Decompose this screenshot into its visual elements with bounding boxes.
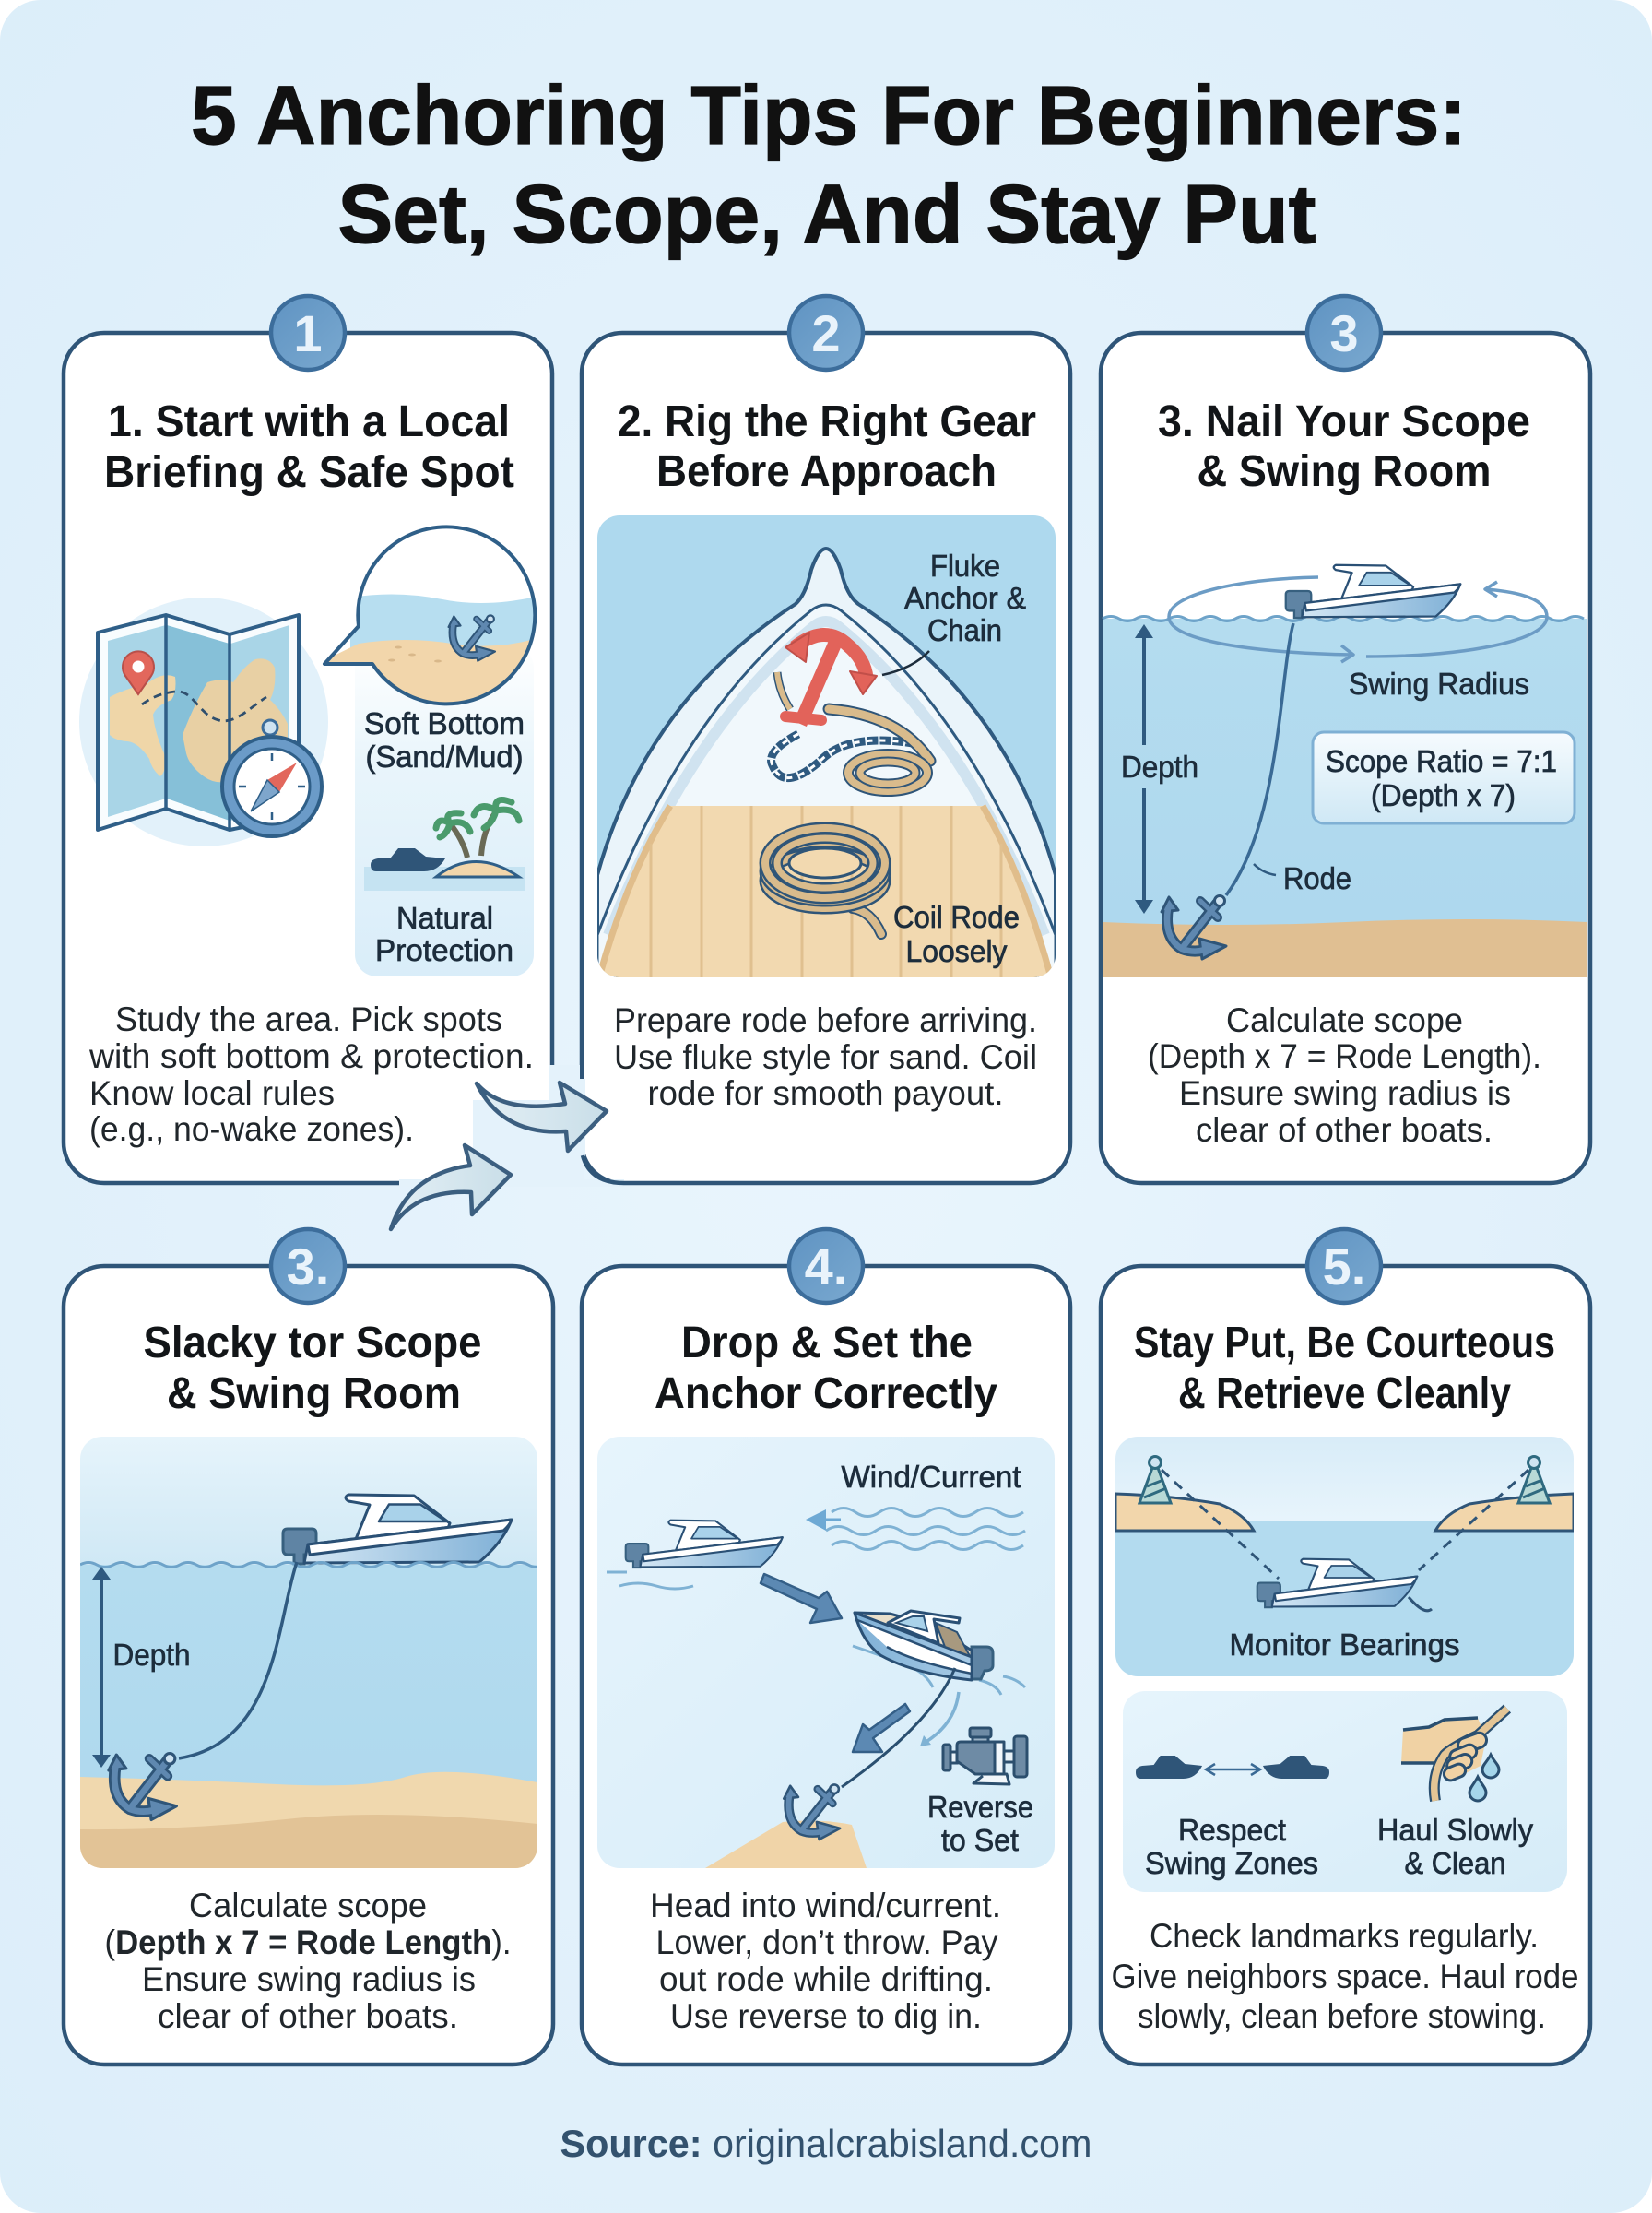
label: swing radius: Swing Radius (1349, 667, 1529, 701)
line: bow rode (1409, 1597, 1432, 1611)
bottom edge cover between cards (399, 1079, 624, 1187)
label: depth: Depth (1121, 750, 1198, 784)
line: rode (842, 1668, 955, 1787)
label: respect swing zones: Respect (1178, 1813, 1286, 1847)
heading (144, 1319, 481, 1418)
heading 1 (104, 397, 514, 497)
body text 1: (e.g., no-wake zones). (89, 1110, 414, 1148)
label: natural protection: Protection (375, 933, 513, 967)
body text 3: clear of other boats. (1196, 1111, 1493, 1149)
source line: Source: originalcrabisland.com (560, 2122, 1092, 2165)
panel: tip 4 drop and set (582, 1229, 1070, 2065)
body text 2: Prepare rode before arriving. (614, 1001, 1037, 1039)
body text 5: Check landmarks regularly. (1150, 1917, 1539, 1955)
icon: anchor (784, 1784, 840, 1840)
line: bearing left (1162, 1470, 1279, 1579)
heading 2: 2. Rig the Right Gear (618, 397, 1036, 446)
body text 4: Use reverse to dig in. (670, 1997, 982, 2035)
icon: boat reversing (853, 1611, 1025, 1695)
icon: boat (1257, 1559, 1417, 1607)
illustration: monitor bearings (1115, 1437, 1574, 1676)
illustration: boat bow from above (597, 515, 1056, 977)
heading 3 (1158, 397, 1530, 496)
arrow: depth (1135, 624, 1153, 914)
title: Set, Scope, And Stay Put (337, 169, 1316, 261)
arrow: lowering (853, 1704, 910, 1752)
body text 4: Lower, don’t throw. Pay (656, 1923, 998, 1961)
badge 1: 1 (293, 304, 323, 362)
panel: slack for scope (64, 1229, 553, 2065)
arrow: depth (92, 1567, 111, 1768)
icon: map and compass (79, 598, 328, 846)
label: reverse to set: Reverse (927, 1790, 1033, 1824)
heading 3: & Swing Room (1197, 447, 1492, 496)
badge 2: 2 (811, 304, 841, 362)
icon: wind waves and arrow (806, 1509, 1025, 1549)
label: respect swing zones: Swing Zones (1145, 1846, 1318, 1880)
illustration: rode and depth (80, 1437, 545, 1868)
body text 1 (88, 1000, 534, 1148)
badge 4 (789, 1229, 863, 1303)
badge 2 (789, 296, 863, 370)
body text: clear of other boats. (158, 1997, 458, 2035)
label: depth: Depth (112, 1638, 190, 1672)
callout: fluke anchor label: Anchor & (904, 581, 1026, 615)
icon: boat approaching (607, 1521, 783, 1589)
callout: scope ratio box: Scope Ratio = 7:1 (1326, 744, 1557, 778)
callout: coil rode label (893, 900, 1020, 968)
label: natural protection: Natural (396, 901, 493, 935)
badge 4: 4. (805, 1237, 847, 1296)
panel: tip 3 nail your scope (1101, 296, 1590, 1183)
background patch behind flow arrows (473, 1065, 584, 1183)
icon: speech bubble with anchor in sand (313, 527, 544, 710)
arrow: motion to drop (761, 1574, 842, 1623)
panel: soft bottom and protection (313, 527, 544, 976)
panel: tip 1 local briefing (64, 296, 552, 1183)
icon: hand hauling rope with drops (1401, 1709, 1507, 1801)
callout: rode label (1254, 861, 1351, 895)
callout: fluke anchor label: Chain (927, 613, 1002, 647)
badge 1 (271, 296, 345, 370)
body text 2 (614, 1001, 1037, 1112)
badge 5 (1307, 1229, 1381, 1303)
badge 3 dot (271, 1229, 345, 1303)
icon: right tower (1518, 1457, 1550, 1503)
callout: scope ratio box (1313, 732, 1575, 823)
illustration: scope diagram (1103, 565, 1587, 977)
sand mound (705, 1821, 867, 1868)
callout: coil rode label: Loosely (905, 934, 1008, 968)
callout: coil rode label: Coil Rode (893, 900, 1020, 934)
body text: (Depth x 7 = Rode Length). (105, 1923, 511, 1961)
body text 3: (Depth x 7 = Rode Length). (1148, 1037, 1541, 1075)
body text 4 (650, 1887, 1001, 2035)
badge 3 dot: 3. (287, 1237, 329, 1296)
heading: & Swing Room (167, 1369, 461, 1418)
arrow: card 1 to card 2 (477, 1083, 607, 1151)
label: reverse to set (929, 1796, 1032, 1852)
heading: Slacky tor Scope (144, 1319, 481, 1367)
heading 4: Anchor Correctly (655, 1369, 997, 1418)
heading 5 (1134, 1319, 1555, 1418)
line: rode (179, 1562, 297, 1758)
badge 3 (1307, 296, 1381, 370)
land: left shore (1115, 1494, 1254, 1531)
arrow: reverse curve (920, 1692, 959, 1746)
heading 1: Briefing & Safe Spot (104, 448, 514, 497)
title (191, 70, 1467, 261)
icon: boat (283, 1495, 512, 1564)
icon: engine (943, 1728, 1027, 1784)
body text 5: Give neighbors space. Haul rode (1112, 1958, 1578, 1995)
title: 5 Anchoring Tips For Beginners: (191, 70, 1467, 162)
icon: anchor (109, 1754, 176, 1819)
label: soft bottom: Soft Bottom (364, 706, 525, 740)
label: haul slowly and clean (1377, 1813, 1533, 1880)
body text 3: Ensure swing radius is (1179, 1074, 1511, 1112)
icon: coiled rope on deck (765, 828, 885, 934)
panel: tip 2 rig the gear (582, 296, 1070, 1183)
body text 3: Calculate scope (1226, 1001, 1463, 1039)
body text 3 (1148, 1001, 1541, 1149)
label: natural protection (375, 901, 513, 967)
icon: boat near palm island (364, 799, 525, 891)
callout: scope ratio box: (Depth x 7) (1371, 778, 1516, 812)
arrow: swing radius ellipse (1169, 577, 1547, 662)
body text (105, 1887, 511, 2035)
line: rode (1226, 623, 1293, 895)
heading 3: 3. Nail Your Scope (1158, 397, 1530, 446)
badge 5: 5. (1323, 1237, 1365, 1296)
illustration: drop and set sequence (597, 1437, 1055, 1868)
icon: boat (1286, 565, 1460, 618)
callout: rode label: Rode (1283, 861, 1351, 895)
body text 5: slowly, clean before stowing. (1138, 1997, 1546, 2035)
panel: tip 5 stay put (1101, 1229, 1590, 2065)
callout: fluke anchor label: Fluke (930, 549, 1000, 583)
heading 1: 1. Start with a Local (108, 397, 510, 446)
body text: Calculate scope (189, 1887, 427, 1924)
land: right shore (1435, 1494, 1574, 1531)
body text 1: with soft bottom & protection. (88, 1037, 534, 1075)
label: wind current: Wind/Current (841, 1460, 1021, 1494)
body text 4: out rode while drifting. (659, 1960, 993, 1998)
icon: red fluke anchor with chain and rope (772, 633, 930, 791)
label: reverse to set: to Set (941, 1823, 1019, 1857)
heading 4 (655, 1319, 997, 1418)
heading 5: & Retrieve Cleanly (1178, 1369, 1511, 1418)
body text 1: Study the area. Pick spots (115, 1000, 502, 1038)
icon: anchor in sand (1162, 896, 1226, 959)
heading 2 (618, 397, 1036, 496)
body text 2: Use fluke style for sand. Coil (614, 1038, 1037, 1076)
body text: Ensure swing radius is (142, 1960, 476, 1998)
body text 4: Head into wind/current. (650, 1887, 1001, 1924)
badge 3: 3 (1329, 304, 1359, 362)
label: soft bottom (364, 706, 525, 774)
body text 2: rode for smooth payout. (647, 1074, 1003, 1112)
label: respect swing zones (1145, 1813, 1318, 1880)
icon: left tower (1139, 1457, 1171, 1503)
heading 4: Drop & Set the (681, 1319, 973, 1367)
label: soft bottom: (Sand/Mud) (365, 740, 524, 774)
heading 5: Stay Put, Be Courteous (1134, 1319, 1555, 1367)
body text 5 (1112, 1917, 1578, 2035)
panel: respect and haul (1123, 1691, 1567, 1892)
label: haul slowly and clean: & Clean (1405, 1846, 1506, 1880)
body text 1: Know local rules (89, 1074, 335, 1112)
label: monitor bearings: Monitor Bearings (1230, 1627, 1460, 1662)
callout: fluke anchor label (882, 549, 1026, 675)
line: bearing right (1419, 1470, 1528, 1570)
heading 2: Before Approach (656, 447, 997, 496)
arrow: lower flow (391, 1145, 511, 1229)
label: haul slowly and clean: Haul Slowly (1377, 1813, 1533, 1847)
icon: two boats with spacing arrow (1136, 1756, 1329, 1779)
